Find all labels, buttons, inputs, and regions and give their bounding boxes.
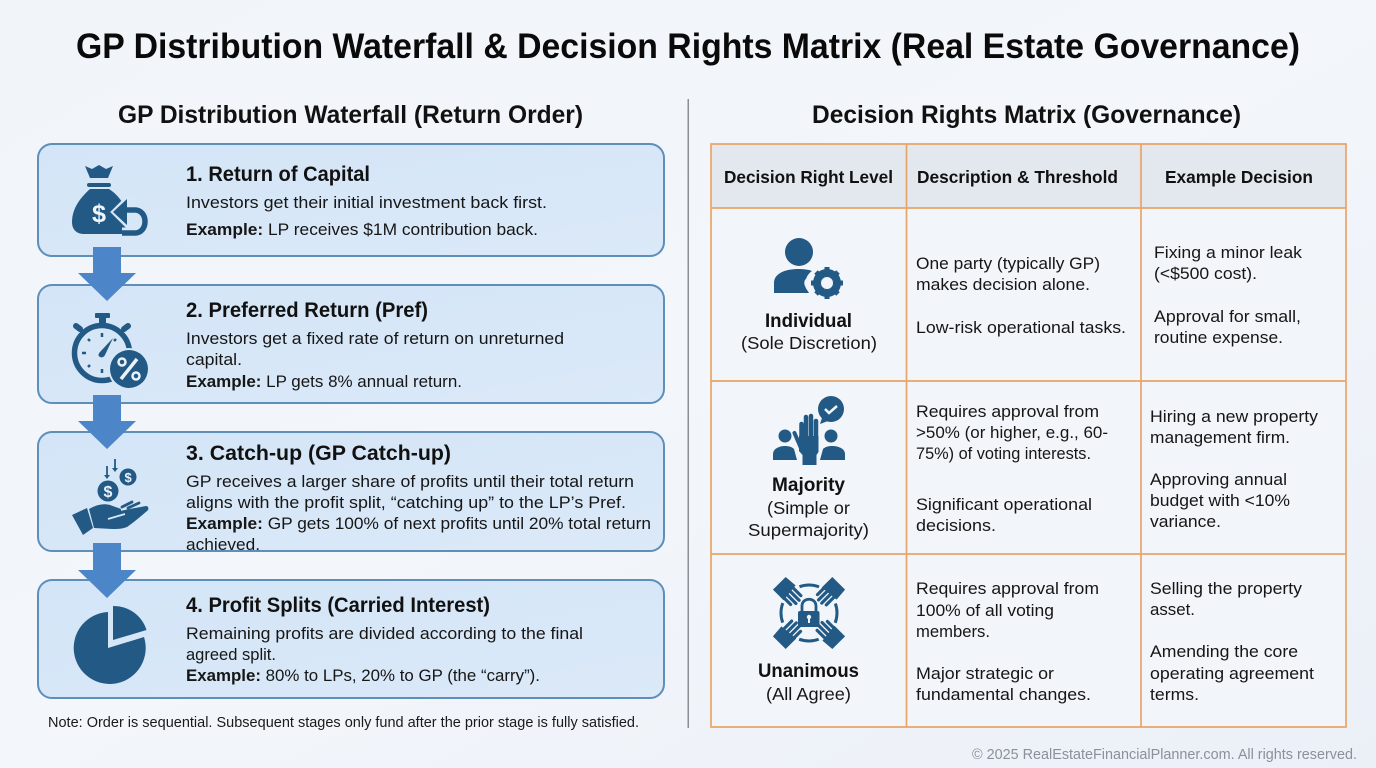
stage 3 example: Example: GP gets 100% of next profits until 20% total return <box>186 514 651 533</box>
stage 1 example: Example: LP receives $1M contribution back. <box>186 220 538 239</box>
description: Requires approval from <box>916 579 1099 598</box>
icon: money bag with return arrow <box>72 165 145 234</box>
table header: Description & Threshold <box>917 167 1118 187</box>
example: asset. <box>1150 600 1195 619</box>
example: management firm. <box>1150 428 1290 447</box>
description: Low-risk operational tasks. <box>916 318 1126 337</box>
level label: Individual <box>765 310 852 332</box>
description: decisions. <box>916 516 996 535</box>
icon: raised hand with people and check <box>773 396 845 465</box>
stage 4 example: Example: 80% to LPs, 20% to GP (the “carry”). <box>186 666 540 685</box>
stage 2 description: capital. <box>186 350 242 369</box>
description: makes decision alone. <box>916 275 1090 294</box>
panel: GP distribution waterfall <box>38 101 664 731</box>
example: Hiring a new property <box>1150 407 1319 426</box>
example <box>1150 407 1319 531</box>
stage 4 heading: 4. Profit Splits (Carried Interest) <box>186 593 490 617</box>
description <box>916 402 1108 535</box>
level label: Unanimous <box>758 660 859 682</box>
example: Approving annual <box>1150 470 1287 489</box>
matrix table grid <box>711 144 1346 727</box>
stage 1 heading: 1. Return of Capital <box>186 162 370 186</box>
title: GP Distribution Waterfall & Decision Rights Matrix (Real Estate Governance) <box>76 27 1300 66</box>
table header: Example Decision <box>1165 167 1313 187</box>
level sublabel: (Sole Discretion) <box>741 333 877 353</box>
table header: Decision Right Level <box>724 167 893 187</box>
example: routine expense. <box>1154 328 1283 347</box>
row: majority <box>748 396 1319 540</box>
level sublabel: (Simple or <box>767 498 850 518</box>
stage 1 description: Investors get their initial investment back first. <box>186 193 547 212</box>
stage 3 example: achieved. <box>186 535 260 554</box>
icon: hand receiving coins <box>72 459 148 535</box>
footer copyright: © 2025 RealEstateFinancialPlanner.com. All rights reserved. <box>972 747 1357 763</box>
example: budget with <10% <box>1150 491 1290 510</box>
level sublabel: Supermajority) <box>748 520 869 540</box>
icon: money bag with return arrow: $ <box>92 200 106 228</box>
example: (<$500 cost). <box>1154 264 1257 283</box>
stage 2 example: Example: LP gets 8% annual return. <box>186 372 462 391</box>
example: Amending the core <box>1150 642 1298 661</box>
stage 2 heading: 2. Preferred Return (Pref) <box>186 298 428 322</box>
description: 75%) of voting interests. <box>916 444 1091 463</box>
heading: matrix: Decision Rights Matrix (Governance) <box>812 101 1241 129</box>
description: >50% (or higher, e.g., 60- <box>916 423 1108 442</box>
stage 2: preferred return <box>38 285 664 403</box>
note: Note: Order is sequential. Subsequent stages only fund after the prior stage is fully satisfied. <box>48 715 639 731</box>
description: Significant operational <box>916 495 1092 514</box>
icon: four hands around a lock <box>772 576 846 650</box>
arrow: stage 3 to 4 <box>78 543 136 598</box>
row: individual <box>741 238 1303 353</box>
description: Requires approval from <box>916 402 1099 421</box>
row: unanimous <box>758 576 1314 704</box>
example: variance. <box>1150 512 1221 531</box>
description <box>916 254 1126 337</box>
icon: hand receiving coins: $ <box>124 470 132 485</box>
icon: person with gear <box>774 238 843 299</box>
stage 4 description: agreed split. <box>186 645 276 664</box>
level label: Majority <box>772 474 845 496</box>
example: Selling the property <box>1150 579 1303 598</box>
description: fundamental changes. <box>916 685 1091 704</box>
description: One party (typically GP) <box>916 254 1100 273</box>
icon: stopwatch with percent <box>74 313 150 390</box>
description: 100% of all voting <box>916 601 1054 620</box>
description: Major strategic or <box>916 664 1054 683</box>
table header <box>724 167 1313 187</box>
stage 4 description <box>186 624 583 664</box>
stage 4: profit splits <box>38 580 664 698</box>
arrow: stage 2 to 3 <box>78 395 136 449</box>
level sublabel <box>748 498 869 540</box>
stage 4 description: Remaining profits are divided according to the final <box>186 624 583 643</box>
description <box>916 579 1099 704</box>
example: Approval for small, <box>1154 307 1301 326</box>
description: members. <box>916 622 990 641</box>
stage 3 description: GP receives a larger share of profits until their total return <box>186 472 634 491</box>
heading: waterfall: GP Distribution Waterfall (Return Order) <box>118 101 583 129</box>
panel: decision rights matrix <box>711 101 1346 727</box>
example: Fixing a minor leak <box>1154 243 1303 262</box>
stage 3 heading: 3. Catch-up (GP Catch-up) <box>186 441 451 465</box>
level sublabel: (All Agree) <box>766 684 851 704</box>
example <box>1154 243 1303 347</box>
icon: hand receiving coins: $ <box>104 484 112 501</box>
arrow: stage 1 to 2 <box>78 247 136 301</box>
stage 3 description: aligns with the profit split, “catching up” to the LP’s Pref. <box>186 493 626 512</box>
example: terms. <box>1150 685 1199 704</box>
icon: pie chart <box>74 606 146 684</box>
stage 1: return of capital <box>38 144 664 256</box>
stage 2 description: Investors get a fixed rate of return on unreturned <box>186 329 564 348</box>
stage 2 description <box>186 329 564 369</box>
example: operating agreement <box>1150 664 1314 683</box>
stage 3 example <box>186 517 650 550</box>
stage 3 description <box>186 472 634 512</box>
stage 3: catch-up <box>38 432 664 554</box>
example <box>1150 579 1314 704</box>
